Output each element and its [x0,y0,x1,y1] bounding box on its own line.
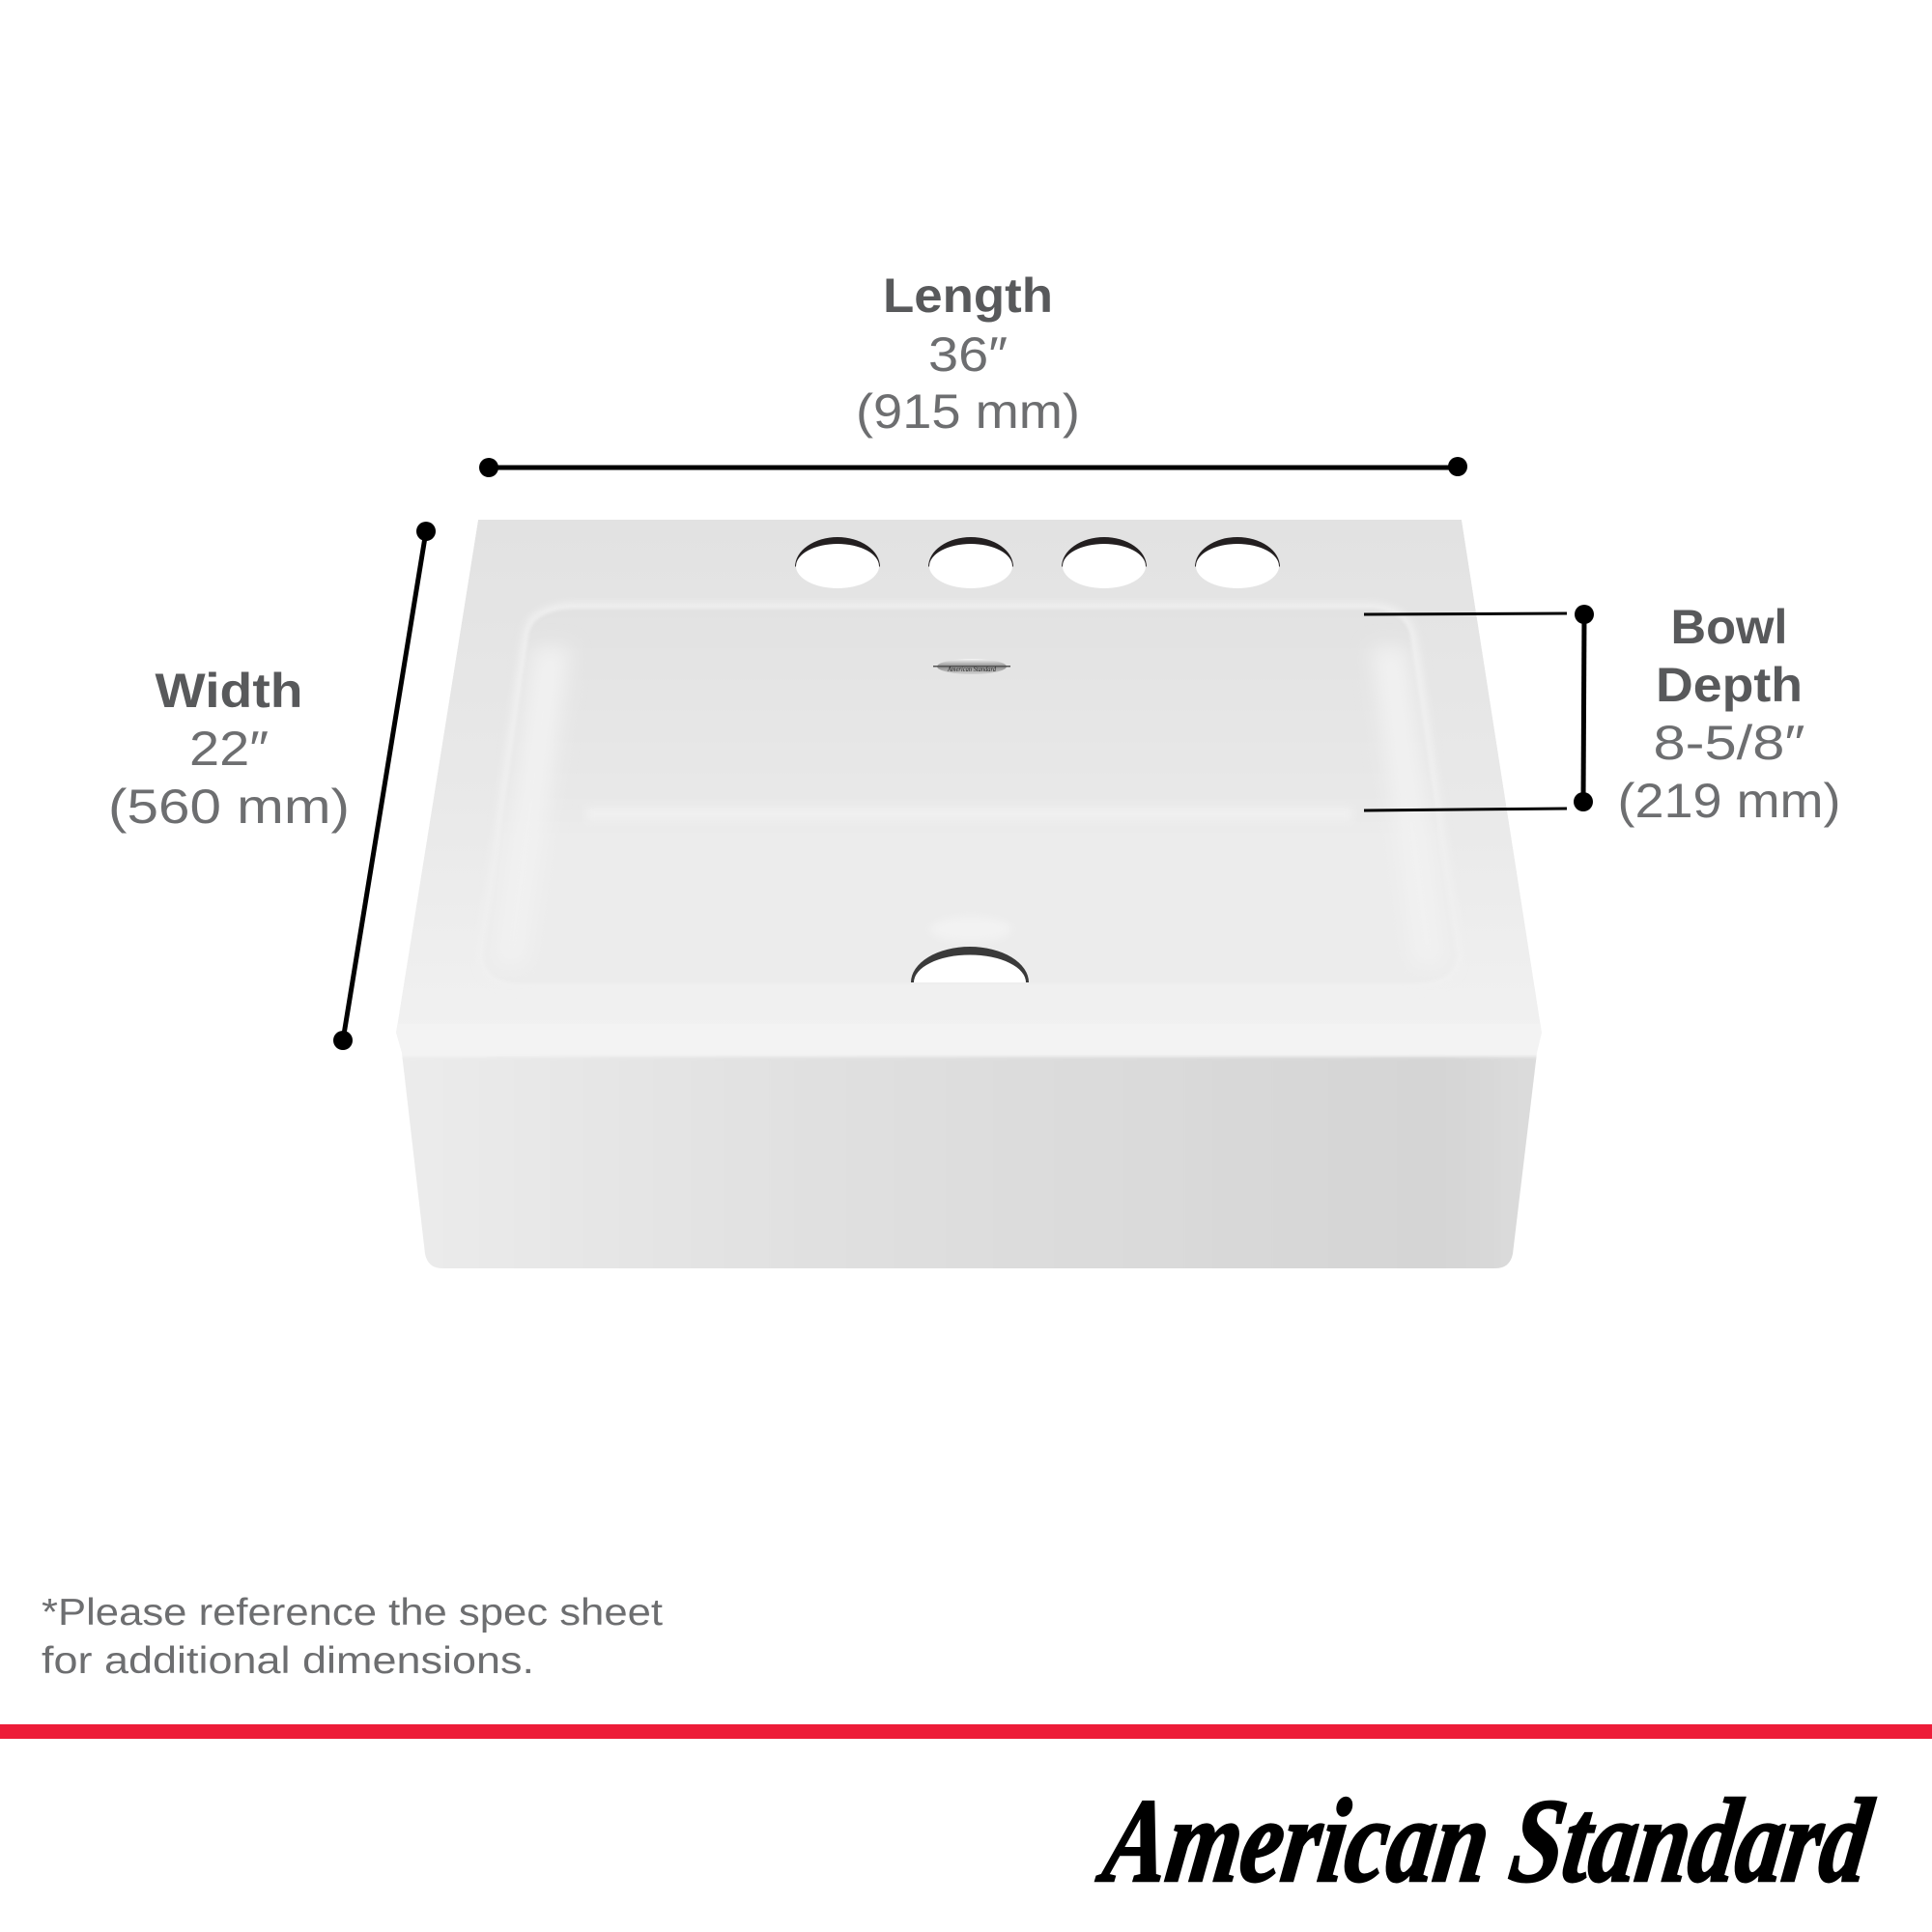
length label: 36″ [928,327,1008,382]
hole 4 [1195,537,1280,588]
length label [856,269,1080,439]
bowl depth label: Bowl [1671,600,1787,654]
width dimension line [333,522,436,1050]
bowl depth label: (219 mm) [1617,774,1841,828]
hole 1 [795,537,880,588]
length dimension line [479,457,1467,477]
footnote: *Please reference the spec sheet [42,1592,663,1634]
bowl basin [483,609,1457,983]
bowl [477,603,1463,989]
drain [911,917,1029,982]
emblem [933,659,1010,674]
footnote [42,1592,663,1682]
bowl depth label [1617,600,1841,828]
hole 2 [928,537,1013,588]
rim highlight [396,1033,1542,1057]
sink body [386,520,1555,1275]
width label: Width [155,664,303,718]
sink top deck [396,520,1542,1033]
hole 3 [1062,537,1147,588]
bowl depth dimension line [1364,605,1594,811]
sink illustration [386,520,1555,1275]
bowl inner step highlight [586,808,1352,821]
faucet holes [795,537,1280,588]
bowl rim highlight [477,603,1463,989]
width label: 22″ [189,722,269,776]
width label: (560 mm) [108,780,350,834]
length label: (915 mm) [856,384,1080,439]
emblem: American Standard [947,666,996,673]
footnote: for additional dimensions. [42,1640,534,1682]
bowl depth label: 8-5/8″ [1654,716,1804,770]
right wall sheen [1372,647,1447,966]
red divider bar [0,1724,1932,1739]
front apron [386,1057,1555,1275]
bowl depth label: Depth [1656,658,1803,712]
left wall sheen [493,647,570,966]
width label [108,664,350,834]
length label: Length [883,269,1053,323]
